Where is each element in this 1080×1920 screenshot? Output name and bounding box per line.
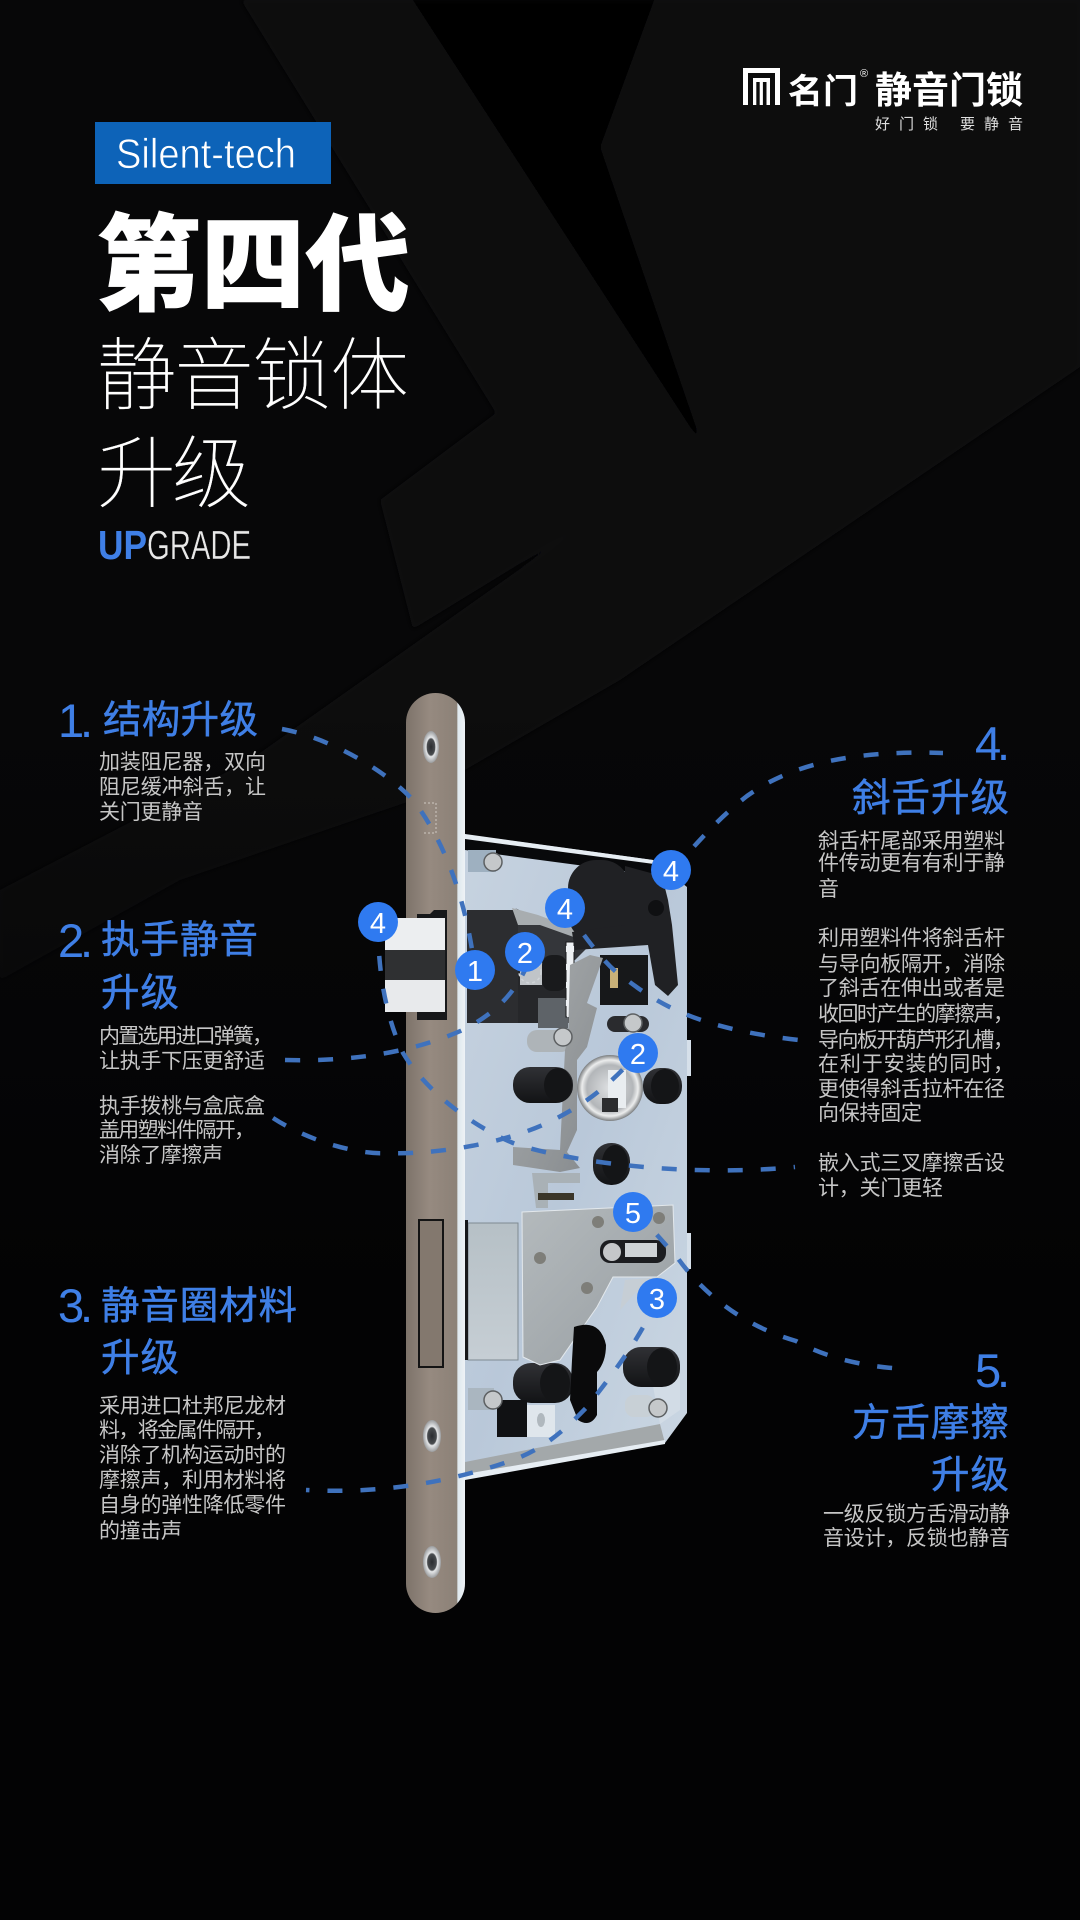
black lever	[568, 860, 678, 1005]
logo: brand mark and slogan: 名门	[788, 73, 858, 111]
dashed leader lines	[273, 729, 943, 1491]
section 2: 执手静音升级: 盖用塑料件隔开，	[99, 1119, 255, 1142]
section 4: 斜舌升级: 收回时产生的摩擦声，	[818, 1003, 1014, 1026]
section 5: 方舌摩擦升级: 升级	[931, 1454, 1009, 1497]
section 5: 方舌摩擦升级: 方舌摩擦	[852, 1402, 1009, 1445]
latch bolt	[385, 910, 447, 1020]
numbered markers: 4	[663, 856, 679, 888]
subtitle: 静音锁体升级: 静音锁体	[97, 331, 409, 420]
section 1: 结构升级: 加装阻尼器，双向	[99, 751, 266, 774]
section 4: 斜舌升级: 利用塑料件将斜舌杆	[818, 927, 1005, 950]
numbered markers: 2	[630, 1039, 646, 1071]
logo: brand mark and slogan: 静音门锁	[875, 70, 1023, 111]
tag: Silent-tech	[95, 122, 331, 184]
section 2: 执手静音升级: 让执手下压更舒适	[99, 1050, 265, 1073]
tag: Silent-tech: Silent-tech	[116, 130, 296, 177]
tab parts	[532, 1173, 580, 1208]
section 4: 斜舌升级: 与导向板隔开，消除	[818, 953, 1005, 976]
section 1: 结构升级: 结构升级	[103, 699, 258, 742]
logo: brand mark and slogan: 好 门 锁 要 静 音	[875, 116, 1023, 133]
section 3: 静音圈材料升级: 采用进口杜邦尼龙材	[99, 1395, 286, 1418]
faceplate	[406, 693, 465, 1613]
title: 第四代: 第四代	[96, 208, 410, 325]
section 4: 斜舌升级: 嵌入式三叉摩擦舌设	[818, 1152, 1005, 1175]
subtitle: 静音锁体升级: 升级	[97, 429, 251, 518]
keyhole	[570, 1325, 606, 1423]
section 3: 静音圈材料升级: 消除了机构运动时的	[99, 1444, 286, 1467]
numbered markers: 1	[467, 956, 483, 988]
section 4: 斜舌升级: 4.	[975, 717, 1010, 770]
numbered markers: 5	[625, 1198, 641, 1230]
section 1: 结构升级: 1.	[58, 694, 93, 747]
section 3: 静音圈材料升级: 自身的弹性降低零件	[99, 1494, 286, 1517]
section 4: 斜舌升级: 音	[818, 878, 839, 901]
section 4: 斜舌升级	[818, 717, 1014, 1200]
section 4: 斜舌升级: 件传动更有有利于静	[818, 852, 1005, 875]
section 4: 斜舌升级: 斜舌杆尾部采用塑料	[818, 830, 1005, 853]
section 2: 执手静音升级	[58, 914, 273, 1167]
small plate	[497, 1400, 555, 1437]
icon: brand mark	[743, 68, 780, 105]
section 5: 方舌摩擦升级: 音设计，反锁也静音	[823, 1527, 1010, 1550]
label: UPGRADE: UP	[98, 522, 147, 568]
section 4: 斜舌升级: 更使得斜舌拉杆在径	[818, 1078, 1005, 1101]
section 3: 静音圈材料升级: 静音圈材料	[101, 1285, 297, 1328]
section 5: 方舌摩擦升级	[823, 1344, 1010, 1550]
label: UPGRADE: GRADE	[147, 522, 251, 568]
label: UPGRADE	[98, 522, 251, 568]
dark housing and spring	[467, 908, 590, 1028]
section 2: 执手静音升级: 执手拨桃与盒底盒	[99, 1095, 265, 1118]
section 3: 静音圈材料升级: 3.	[58, 1279, 93, 1332]
section 2: 执手静音升级: 升级	[101, 972, 179, 1015]
section 2: 执手静音升级: 2.	[58, 914, 93, 967]
section 1: 结构升级	[58, 694, 266, 824]
cylinder ring	[577, 1055, 643, 1121]
screws	[468, 850, 667, 1417]
deadbolt assembly	[465, 1205, 675, 1365]
section 5: 方舌摩擦升级: 一级反锁方舌滑动静	[823, 1503, 1010, 1526]
subtitle: 静音锁体升级	[97, 331, 409, 518]
section 5: 方舌摩擦升级: 5.	[975, 1344, 1010, 1397]
section 3: 静音圈材料升级: 的撞击声	[99, 1520, 182, 1543]
lock body illustration	[385, 693, 691, 1613]
section 4: 斜舌升级: 在利于安装的同时，	[818, 1053, 1014, 1076]
logo: brand mark and slogan	[743, 68, 1023, 133]
section 4: 斜舌升级: 导向板开葫芦形孔槽，	[818, 1029, 1014, 1052]
section 1: 结构升级: 关门更静音	[99, 801, 203, 824]
lock case	[462, 834, 691, 1480]
section 3: 静音圈材料升级: 料，将金属件隔开，	[99, 1419, 275, 1442]
numbered markers: 4	[557, 894, 573, 926]
slot with screw	[527, 1016, 649, 1052]
section 4: 斜舌升级: 向保持固定	[818, 1102, 922, 1125]
section 2: 执手静音升级: 执手静音	[101, 919, 258, 962]
section 1: 结构升级: 阻尼缓冲斜舌，让	[99, 776, 266, 799]
silver hook part	[513, 955, 603, 1172]
rubber rollers	[513, 1067, 682, 1403]
section 4: 斜舌升级: 了斜舌在伸出或者是	[818, 977, 1005, 1000]
logo: brand mark and slogan: ®	[860, 68, 868, 80]
numbered markers	[358, 850, 691, 1318]
section 2: 执手静音升级: 内置选用进口弹簧，	[99, 1025, 273, 1048]
section 3: 静音圈材料升级: 升级	[101, 1337, 179, 1380]
numbered markers: 3	[649, 1284, 665, 1316]
numbered markers: 4	[370, 908, 386, 940]
section 3: 静音圈材料升级	[58, 1279, 297, 1543]
numbered markers: 2	[517, 938, 533, 970]
section 3: 静音圈材料升级: 摩擦声，利用材料将	[99, 1469, 286, 1492]
section 4: 斜舌升级: 计，关门更轻	[818, 1177, 943, 1200]
section 2: 执手静音升级: 消除了摩擦声	[99, 1144, 223, 1167]
section 4: 斜舌升级: 斜舌升级	[852, 777, 1009, 820]
